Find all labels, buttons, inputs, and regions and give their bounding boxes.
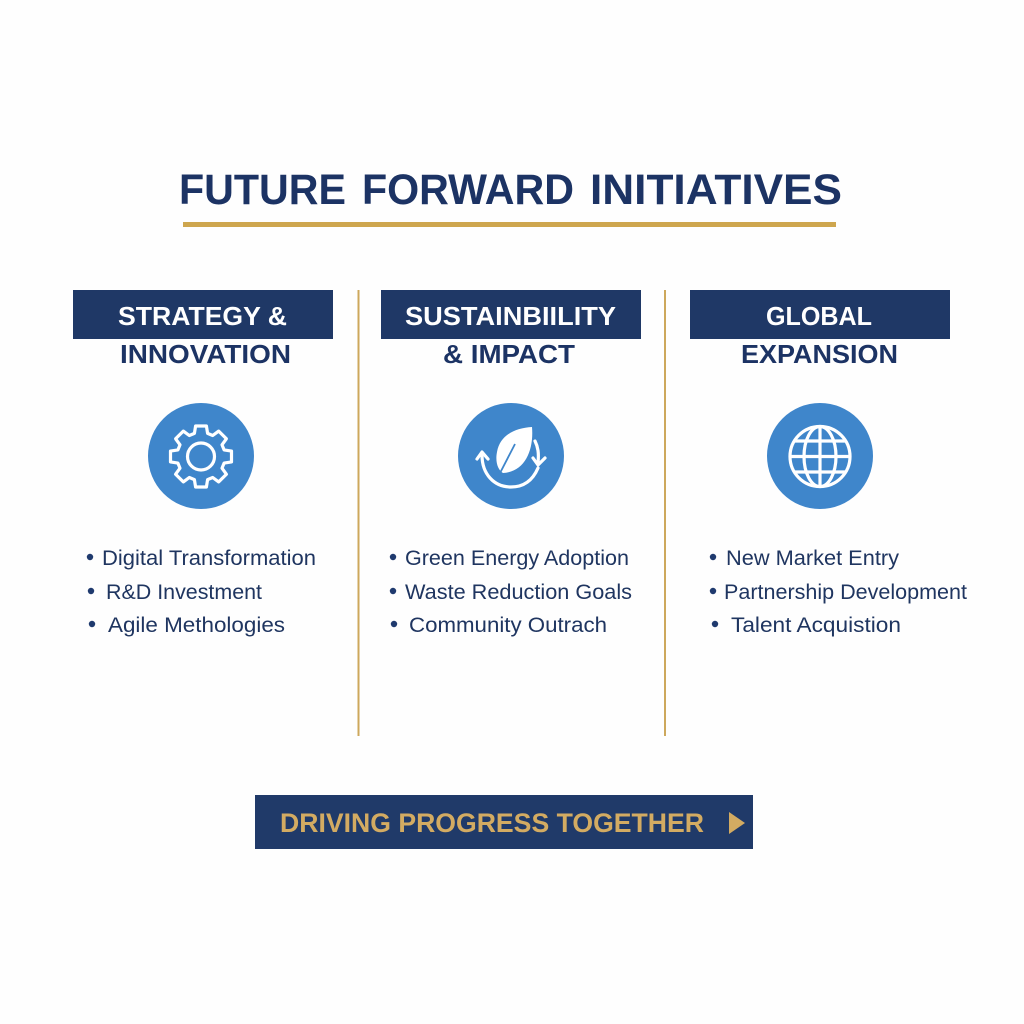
icon: arrow xyxy=(729,812,745,834)
heading: sustainability and impact: & IMPACT xyxy=(443,339,575,369)
bullet list: strategy and innovation: R&D Investment xyxy=(106,581,262,604)
divider xyxy=(664,290,666,736)
callout: driving progress together: DRIVING PROGRESS TOGETHER xyxy=(280,808,704,838)
bullet list: global expansion: Partnership Development xyxy=(724,581,967,604)
icon: globe xyxy=(767,403,873,509)
bullet list: global expansion xyxy=(710,547,967,637)
heading: sustainability and impact xyxy=(381,290,641,369)
icon: leaf with cycle arrows xyxy=(458,403,564,509)
heading: global expansion xyxy=(690,290,950,369)
divider xyxy=(358,290,360,736)
title: INITIATIVES xyxy=(590,166,842,214)
bullet list: strategy and innovation: Agile Methologies xyxy=(108,614,285,637)
panel: global expansion xyxy=(690,290,967,637)
panel: strategy and innovation xyxy=(73,290,333,637)
heading: strategy and innovation: STRATEGY & xyxy=(118,301,287,331)
title xyxy=(179,166,842,227)
icon: gear xyxy=(148,403,254,509)
title: FORWARD xyxy=(362,166,574,214)
bullet list: sustainability and impact xyxy=(390,547,632,637)
heading: global expansion: EXPANSION xyxy=(741,339,898,369)
bullet list: sustainability and impact: Community Outrach xyxy=(409,614,607,637)
heading: strategy and innovation xyxy=(73,290,333,369)
bullet list: global expansion: New Market Entry xyxy=(726,547,900,570)
bullet list: sustainability and impact: Waste Reduction Goals xyxy=(405,581,632,604)
title: FUTURE xyxy=(179,166,346,214)
bullet list: strategy and innovation xyxy=(87,547,316,637)
panel: sustainability and impact xyxy=(381,290,641,637)
bullet list: sustainability and impact: Green Energy Adoption xyxy=(405,547,629,570)
callout: driving progress together xyxy=(255,795,753,849)
bullet list: strategy and innovation: Digital Transformation xyxy=(102,547,316,570)
bullet list: global expansion: Talent Acquistion xyxy=(731,614,901,637)
heading: global expansion: GLOBAL xyxy=(766,301,872,331)
heading: sustainability and impact: SUSTAINBIILITY xyxy=(405,301,616,331)
heading: strategy and innovation: INNOVATION xyxy=(120,339,291,369)
